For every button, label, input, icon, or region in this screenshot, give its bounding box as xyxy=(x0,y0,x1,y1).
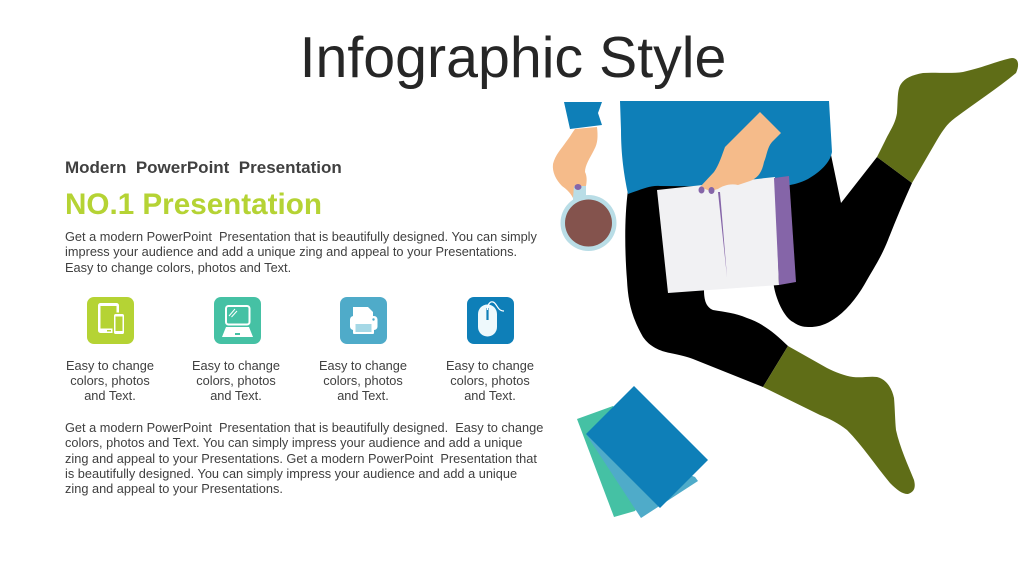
subheading: Modern PowerPoint Presentation xyxy=(65,158,342,177)
closing paragraph: Get a modern PowerPoint Presentation that is beautifully designed. Easy to change colors, photos and Text. You can simply impress your audience and add a unique zing and appeal to your Presentations. Get a modern PowerPoint Presentation that is beautifully designed. You can simply impress your audience and add a unique zing and appeal to your Presentations. xyxy=(65,420,543,496)
olive sock: raised foot xyxy=(877,58,1018,183)
icon: laptop xyxy=(214,297,261,344)
hand on book xyxy=(698,112,781,194)
icon: printer xyxy=(340,297,387,344)
open book xyxy=(657,176,796,293)
icon caption 4: Easy to change colors, photos and Text. xyxy=(446,358,534,403)
olive sock: lower foot xyxy=(763,346,915,494)
intro text: Get a modern PowerPoint Presentation that is beautifully designed. You can simply impress your audience and add a unique zing and appeal to your Presentations. Easy to change colors, photos and Text. xyxy=(65,229,537,275)
icon caption 1: Easy to change colors, photos and Text. xyxy=(66,358,154,403)
title: Infographic Style xyxy=(300,26,726,90)
blue shirt xyxy=(620,101,832,194)
heading: NO.1 Presentation: NO.1 Presentation xyxy=(65,188,322,221)
sleeve cuff xyxy=(564,102,602,129)
icon: tablet and phone xyxy=(87,297,134,344)
icon caption 2: Easy to change colors, photos and Text. xyxy=(192,358,280,403)
icon caption 3: Easy to change colors, photos and Text. xyxy=(319,358,407,403)
icon: computer mouse xyxy=(467,297,514,344)
hand holding cup xyxy=(553,127,598,198)
coffee cup xyxy=(560,186,616,251)
scattered books xyxy=(577,386,708,518)
black leggings xyxy=(625,150,912,387)
